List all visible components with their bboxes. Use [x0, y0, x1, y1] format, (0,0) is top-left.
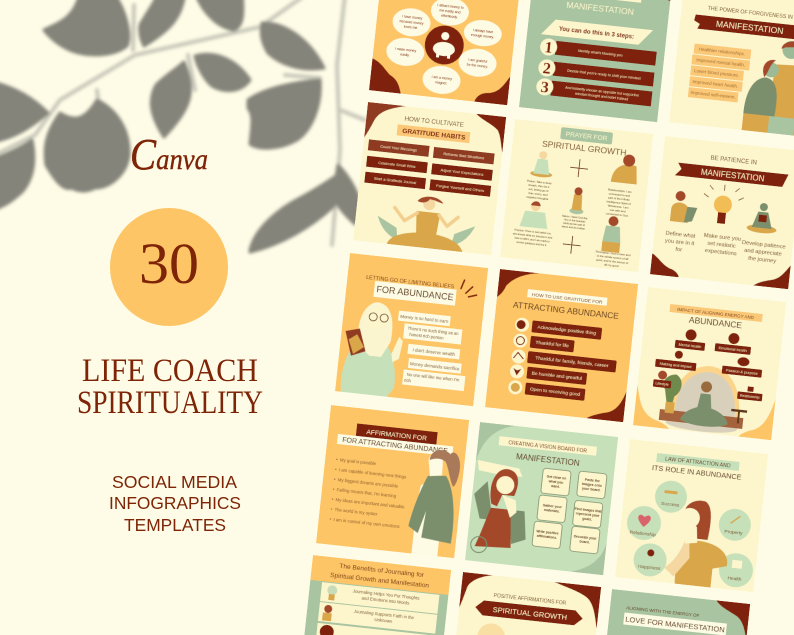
title: SPIRITUALITY: [77, 385, 263, 421]
panel: patience: the journey: [748, 256, 777, 265]
panel: prayer: receive guidance and live it.: [516, 241, 547, 247]
panel: 3 steps: Identify what's blocking you: [578, 49, 623, 58]
panel: prayer: world and am part of: [563, 222, 585, 227]
panel: patience: and appreciate: [744, 248, 782, 258]
list: • I am in control of my own emotions: [329, 517, 400, 529]
panel: journaling: The Benefits of Journaling for: [339, 563, 425, 579]
icon: plus: [570, 159, 588, 178]
panel: forgiveness: Lower blood pressure.: [694, 68, 739, 78]
panel: positive affirmations: [448, 572, 601, 635]
panel: gratitude habits: GRATITUDE HABITS: [402, 128, 466, 142]
panel: positive affirmations: SPIRITUAL GROWTH: [492, 605, 568, 622]
figure: woman praying: [663, 497, 734, 589]
icon: circle: [476, 622, 507, 635]
panel: impact of aligning energy: IMPACT OF ALIGNING ENERGY AND: [677, 307, 755, 320]
panel: gratitude habits: Count Your Blessings: [380, 144, 417, 153]
figure: kneeling person: [569, 187, 586, 215]
panel: prayer: all my good.: [604, 263, 620, 268]
panel: attracting abundance: [485, 269, 638, 422]
panel: vision board: Paste the: [585, 478, 600, 483]
panel: law of attraction: Property: [724, 529, 743, 537]
panel: patience: BE PATIENCE IN: [710, 156, 757, 167]
panel: journaling: and Emotions into Words: [361, 596, 410, 606]
list: • My ideas are important and valuable: [332, 497, 405, 510]
title: LIFE COACH: [82, 353, 258, 389]
panel: attracting abundance: Thankful for family, friends, career: [535, 355, 609, 369]
icon: bulb: [326, 585, 338, 601]
panel: money affirmations: easily.: [400, 52, 410, 57]
panel: prayer: PRAYER FOR: [565, 131, 608, 143]
figure: woman reading: [670, 190, 699, 224]
panel: vision board: want.: [550, 484, 560, 489]
panel: law of attraction: Relationship: [629, 530, 657, 538]
panel: vision board: your board.: [582, 486, 601, 492]
icon: heart: [637, 514, 651, 528]
panel: money affirmations: I always have: [473, 28, 494, 34]
icon: gears: [674, 350, 683, 359]
panel: forgiveness: MANIFESTATION: [716, 19, 784, 36]
panel: money affirmations: I have money: [402, 14, 423, 21]
panel: prayer: Wholeness. I am: [608, 204, 629, 210]
subtitle: SOCIAL MEDIA: [112, 472, 237, 492]
panel: prayer: who knows what my purpose is and: [513, 232, 553, 240]
illustration: couple: [741, 37, 794, 137]
subtitle: [109, 472, 241, 535]
icon: piggy bank: [432, 32, 455, 59]
panel: 3 steps: mindset thought and belief instead: [575, 92, 628, 101]
panel: forgiveness: THE POWER OF FORGIVENESS IN: [707, 6, 793, 21]
panel: prayer: is the infinite source of all: [597, 254, 629, 261]
icon: spark marks: [460, 279, 479, 298]
panel: gratitude habits: Start a Gratitude Journal: [374, 176, 417, 185]
panel: gratitude habits: HOW TO CULTIVATE: [404, 116, 464, 129]
leaf shadow: [0, 0, 365, 252]
panel: prayer: connected to God.: [606, 211, 629, 218]
panel: gratitude habits: Reframe Bad Situations: [443, 151, 485, 160]
panel: limiting beliefs: No one will like me when I'm: [407, 372, 460, 383]
panel: love for manifestation: ALIGNING WITH THE ENERGY OF: [626, 605, 700, 618]
panel: forgiveness: Improved self-esteem.: [690, 90, 736, 100]
panel: patience: Develop patience: [742, 240, 786, 251]
icon: health: [732, 560, 742, 569]
panel: vision board: Write positive: [536, 529, 559, 536]
panel: vision board: affirmations.: [537, 534, 557, 540]
figure: praying person: [530, 150, 555, 178]
figure: meditating person: [519, 200, 550, 229]
panel: prayer: [500, 119, 653, 272]
panel: limiting beliefs: I don't deserve wealth: [412, 347, 456, 357]
list: [329, 457, 410, 529]
panel: prayer: Nature: I thank God that: [562, 215, 588, 220]
panel: vision board: MANIFESTATION: [516, 452, 580, 468]
illustration: seated woman with plant: [658, 366, 748, 433]
panel: limiting beliefs: FOR ABUNDANCE: [376, 284, 454, 302]
panel: prayer: breath, then let it: [528, 183, 550, 189]
panel: money affirmations: me easily and: [439, 8, 461, 15]
panel: attracting abundance: Thankful for life: [535, 340, 569, 349]
panel: prayer: out, letting go of: [528, 187, 549, 193]
panel: impact of aligning energy: Making and impact: [660, 362, 693, 369]
list: • My goal is possible: [336, 457, 377, 466]
list: • Failing means that, I'm learning: [333, 487, 397, 499]
icon: head: [685, 329, 697, 341]
panel: money affirmations: enough money.: [471, 33, 494, 39]
badge: 30: 30: [139, 231, 199, 296]
panel: 3 steps: You can do this in 3 steps:: [558, 27, 634, 41]
panel: 3 steps: 1: [544, 39, 553, 57]
panel: prayer: nature and its creation.: [561, 225, 586, 231]
panel: vision board: goals.: [582, 517, 592, 522]
icon: yin yang: [319, 624, 334, 635]
panel: journaling: Journaling Supports Faith in the: [354, 609, 415, 620]
panel: love for manifestation: [597, 589, 750, 635]
icon: key: [730, 515, 740, 524]
figure: woman thinking: [470, 460, 526, 554]
title: [77, 353, 263, 421]
panel: vision board: [465, 422, 618, 575]
panel: law of attraction: Happiness: [638, 564, 661, 572]
icon: person: [322, 604, 333, 621]
panel: money affirmations: magnet.: [435, 80, 448, 86]
list: • The world is my oyster: [330, 507, 378, 517]
panel: limiting beliefs: There's no such thing as an: [407, 326, 460, 336]
panel: prayer: Intelligence Spirit of: [606, 199, 631, 206]
panel: patience: set realistic: [707, 241, 736, 250]
panel: prayer: part of the Infinite: [608, 196, 630, 202]
panel: vision board: what you: [547, 479, 563, 485]
panel: vision board: Find images that: [574, 507, 603, 514]
panel: law of attraction: Health: [727, 575, 742, 583]
panel: prayer: one with and: [610, 208, 626, 214]
panel: forgiveness: Improved mental health.: [696, 57, 746, 68]
panel: impact of aligning energy: Relationship: [740, 394, 760, 400]
panel: impact of aligning energy: Lifestyle: [655, 381, 669, 387]
panel: money affirmations: [369, 0, 522, 105]
panel: limiting beliefs: Money is so hard to earn: [400, 314, 449, 324]
panel: impact of aligning energy: [633, 287, 786, 440]
panel: 3 steps: 2: [542, 60, 552, 78]
panel: forgiveness: [669, 0, 794, 137]
panel: forgiveness: Healthier relationships.: [698, 46, 745, 57]
panel: vision board: represent your: [576, 511, 600, 518]
panel: journaling: [298, 555, 451, 635]
panel: money affirmations: I am grateful: [468, 58, 488, 64]
panel: gratitude habits: Celebrate Small Wins: [378, 160, 416, 169]
panel: 3 steps: [519, 0, 672, 122]
panel: vision board: images onto: [582, 482, 602, 488]
panel: affirmation list: [316, 405, 469, 558]
panel: law of attraction: [615, 439, 768, 592]
panel: prayer: Perception: God is here and: [596, 250, 631, 257]
panel: money affirmations: for the money.: [466, 63, 488, 69]
logo: Canva: Canva: [130, 130, 208, 179]
panel: limiting beliefs: LETTING GO OF LIMITING BELIEFS: [366, 275, 455, 290]
panel: patience: Make sure you: [703, 233, 741, 243]
panel: affirmation list: FOR ATTRACTING ABUNDANCE: [342, 437, 448, 455]
panel: impact of aligning energy: Emotional health: [718, 346, 747, 353]
panel: love for manifestation: LOVE FOR MANIFESTATION: [625, 615, 725, 634]
panel: gratitude habits: Adjust Your Expectations: [440, 167, 484, 177]
illustration: meditating person: [378, 196, 476, 252]
panel: forgiveness: Improved heart health.: [692, 79, 739, 89]
panel: vision board: materials.: [544, 508, 560, 514]
panel: money affirmations: I am a money: [431, 75, 452, 81]
panel: patience: you are in it: [665, 238, 695, 247]
figure: yoga pose: [746, 203, 776, 234]
list: • My biggest dreams are possible: [334, 477, 399, 489]
panel: 3 steps: MANIFESTATION: [566, 0, 634, 17]
panel: prayer: Purpose: There is God within me,: [514, 229, 552, 236]
figure: thinking person: [611, 153, 640, 185]
panel: prayer: Relationships: I am: [608, 187, 633, 194]
badge: 30: [110, 208, 228, 326]
panel: prayer: negative thoughts.: [526, 195, 549, 201]
icon: emotion: [728, 333, 740, 345]
panel: prayer: fear, worry, and: [528, 191, 548, 197]
panel: limiting beliefs: rich: [404, 378, 412, 383]
panel: prayer: Peace: Take a deep: [527, 179, 552, 185]
panel: prayer: connected to and: [609, 192, 631, 198]
icon: plus lower: [562, 236, 581, 254]
icon: lifestyle: [658, 370, 668, 380]
panel: limiting beliefs: [335, 253, 488, 406]
panel: limiting beliefs: honest rich person: [409, 332, 445, 341]
panel: patience: expectations: [705, 248, 737, 257]
panel: impact of aligning energy: Mental health: [678, 343, 701, 349]
panel: journaling: Spiritual Growth and Manifestation: [330, 572, 430, 590]
figure: woman sitting: [601, 215, 623, 253]
icon: sun: [647, 549, 655, 557]
panel: 3 steps: Decide that you're ready to shift your mindset: [567, 69, 641, 81]
icon: success: [664, 490, 678, 494]
panel: money affirmations: loves me.: [404, 25, 419, 30]
panel: prayer: how to fulfil it, and I am ready to: [514, 237, 550, 244]
panel: journaling: Unknown: [374, 617, 393, 624]
panel: law of attraction: LAW OF ATTRACTION AND: [665, 456, 731, 470]
panel: attracting abundance: Be humble and greatful: [531, 371, 582, 382]
figure: woman in jacket: [405, 447, 462, 558]
panel: positive affirmations: POSITIVE AFFIRMATIONS FOR: [493, 593, 567, 607]
panel: attracting abundance: Acknowledge positive thing: [537, 324, 597, 337]
panel: money affirmations: I attract money to: [437, 3, 464, 10]
panel: vision board: Get clear on: [546, 475, 566, 481]
panel: limiting beliefs: Money demands sacrifice: [410, 361, 460, 372]
panel: attracting abundance: ATTRACTING ABUNDANCE: [513, 300, 620, 321]
panel: vision board: board.: [579, 539, 590, 545]
panel: gratitude habits: Forgive Yourself and Others: [436, 183, 485, 193]
subtitle: TEMPLATES: [124, 515, 226, 535]
panel: affirmation list: AFFIRMATION FOR: [366, 429, 427, 443]
panel: money affirmations: I make money: [395, 47, 417, 53]
subtitle: INFOGRAPHICS: [109, 493, 241, 513]
panel: law of attraction: ITS ROLE IN ABUNDANCE: [652, 463, 742, 482]
panel: vision board: Decorate your: [574, 534, 597, 541]
panel: law of attraction: Success: [661, 501, 680, 509]
panel: impact of aligning energy: Passion & purpose: [726, 368, 758, 376]
panel: impact of aligning energy: ABUNDANCE: [688, 315, 743, 330]
panel: patience: for: [675, 247, 682, 254]
panel: journaling: Journaling Helps You Put Thoughts: [353, 589, 420, 601]
panel: 3 steps: And instantly choose an opposite but supportive: [565, 86, 639, 98]
panel: patience: Define what: [665, 231, 696, 240]
panel: money affirmations: because money: [399, 19, 424, 26]
panel: attracting abundance: Open to receiving good: [530, 386, 581, 398]
panel: prayer: I live in this beautiful: [563, 218, 586, 224]
icon: relationship: [747, 386, 754, 392]
icon: passion: [737, 357, 750, 367]
panel: attracting abundance: HOW TO USE GRATITUDE FOR: [532, 292, 603, 306]
panel: vision board: Gather your: [543, 503, 563, 509]
panel: gratitude habits: [353, 102, 506, 255]
panel: 3 steps: 3: [540, 79, 550, 97]
panel: patience: MANIFESTATION: [700, 168, 765, 183]
panel: vision board: CREATING A VISION BOARD FOR: [508, 440, 588, 455]
icon: light bulb: [704, 184, 744, 224]
list: • I am capable of learning new things: [335, 467, 406, 480]
figure: woman with cards: [340, 302, 403, 397]
panel: prayer: good, and is the source of: [596, 258, 629, 265]
panel: money affirmations: effortlessly.: [441, 14, 458, 19]
panel: patience: [650, 136, 794, 289]
panel: prayer: SPIRITUAL GROWTH: [542, 139, 627, 158]
